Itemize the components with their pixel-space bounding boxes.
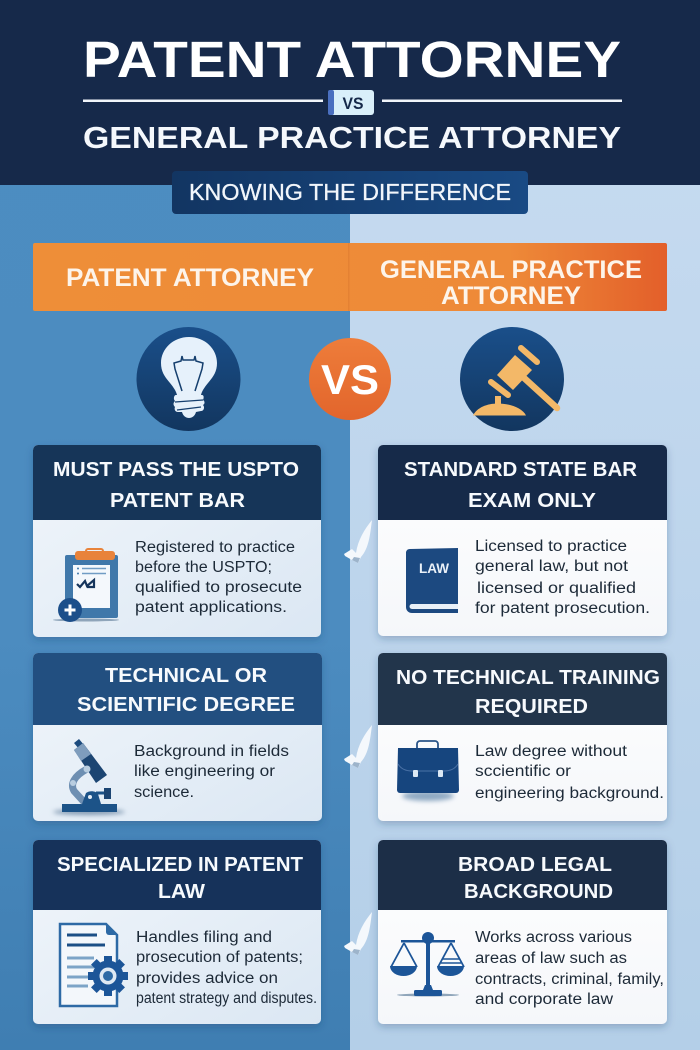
card heading: BROAD LEGAL	[458, 854, 612, 876]
card heading	[33, 653, 322, 725]
icon: microscope	[53, 739, 125, 815]
right background panel	[350, 0, 700, 1050]
orange column header bar	[33, 243, 667, 311]
title: general practice attorney: GENERAL PRACTICE ATTORNEY	[83, 120, 621, 155]
card description: sccientific or	[475, 763, 571, 780]
card heading: MUST PASS THE USPTO	[53, 459, 299, 481]
card heading	[378, 840, 667, 910]
card: no technical training required	[378, 653, 667, 821]
card description: Licensed to practice	[475, 538, 627, 555]
card description: Registered to practice	[135, 539, 295, 556]
card heading: LAW	[158, 881, 205, 903]
icon: document with gear	[60, 924, 128, 1006]
card description: science.	[134, 784, 194, 801]
icon: scales of justice	[390, 932, 464, 996]
card: standard state bar exam only	[378, 445, 667, 636]
card description: and corporate law	[475, 991, 614, 1008]
arrow: row three	[344, 912, 372, 955]
card heading: BACKGROUND	[464, 881, 613, 903]
card: must pass the uspto patent bar	[33, 445, 321, 637]
card description: patent applications.	[135, 599, 287, 616]
card: specialized in patent law	[33, 840, 321, 1024]
icon: clipboard	[53, 549, 119, 622]
icon: gavel	[460, 327, 564, 431]
vs divider: VS	[342, 94, 364, 113]
card: broad legal background	[378, 840, 667, 1024]
card heading: NO TECHNICAL TRAINING	[396, 667, 660, 689]
icon: briefcase	[397, 741, 459, 801]
card description: patent strategy and disputes.	[136, 990, 317, 1007]
icon: vs circle: VS	[321, 356, 379, 403]
card description	[136, 929, 317, 1007]
card description: before the USPTO;	[135, 559, 272, 576]
card description	[475, 743, 664, 802]
orange column header bar: ATTORNEY	[441, 282, 581, 310]
card description: like engineering or	[134, 763, 275, 780]
card description: general law, but not	[475, 558, 629, 575]
icon: law book	[406, 548, 458, 613]
card heading: SPECIALIZED IN PATENT	[57, 854, 303, 876]
icon: law book: LAW	[419, 561, 449, 576]
arrow: row two	[344, 725, 372, 768]
vs divider	[83, 90, 622, 115]
card description: engineering background.	[475, 785, 664, 802]
header band	[0, 0, 700, 185]
card description	[475, 929, 664, 1008]
card description: qualified to prosecute	[135, 579, 302, 596]
card description	[135, 539, 302, 616]
card heading	[378, 653, 667, 725]
card description: provides advice on	[136, 970, 278, 987]
card description: for patent prosecution.	[475, 600, 650, 617]
left background panel	[0, 0, 350, 1050]
icon: vs circle	[309, 338, 391, 420]
card description: Background in fields	[134, 743, 289, 760]
subtitle pill	[172, 171, 528, 214]
card heading: PATENT BAR	[110, 490, 246, 512]
arrow: row one	[344, 520, 372, 563]
card description: prosecution of patents;	[136, 949, 303, 966]
card: technical or scientific degree	[33, 653, 322, 821]
card heading: TECHNICAL OR	[105, 665, 268, 687]
card description: contracts, criminal, family,	[475, 971, 664, 988]
card description: licensed or qualified	[477, 580, 636, 597]
card heading: SCIENTIFIC DEGREE	[77, 694, 295, 716]
card description: areas of law such as	[475, 950, 627, 967]
card description: Law degree without	[475, 743, 628, 760]
card heading	[378, 445, 667, 520]
orange column header bar: PATENT ATTORNEY	[66, 264, 314, 292]
subtitle pill: KNOWING THE DIFFERENCE	[189, 179, 511, 205]
card description: Handles filing and	[136, 929, 272, 946]
card heading	[33, 445, 321, 520]
icon: light bulb	[136, 327, 240, 431]
orange column header bar: GENERAL PRACTICE	[380, 256, 642, 284]
card description: Works across various	[475, 929, 632, 946]
card heading	[33, 840, 321, 910]
card description	[134, 743, 289, 801]
card description	[475, 538, 650, 617]
card heading: EXAM ONLY	[468, 490, 597, 512]
card heading: STANDARD STATE BAR	[404, 459, 638, 481]
card heading: REQUIRED	[475, 696, 588, 718]
title: patent attorney: PATENT ATTORNEY	[83, 31, 621, 88]
